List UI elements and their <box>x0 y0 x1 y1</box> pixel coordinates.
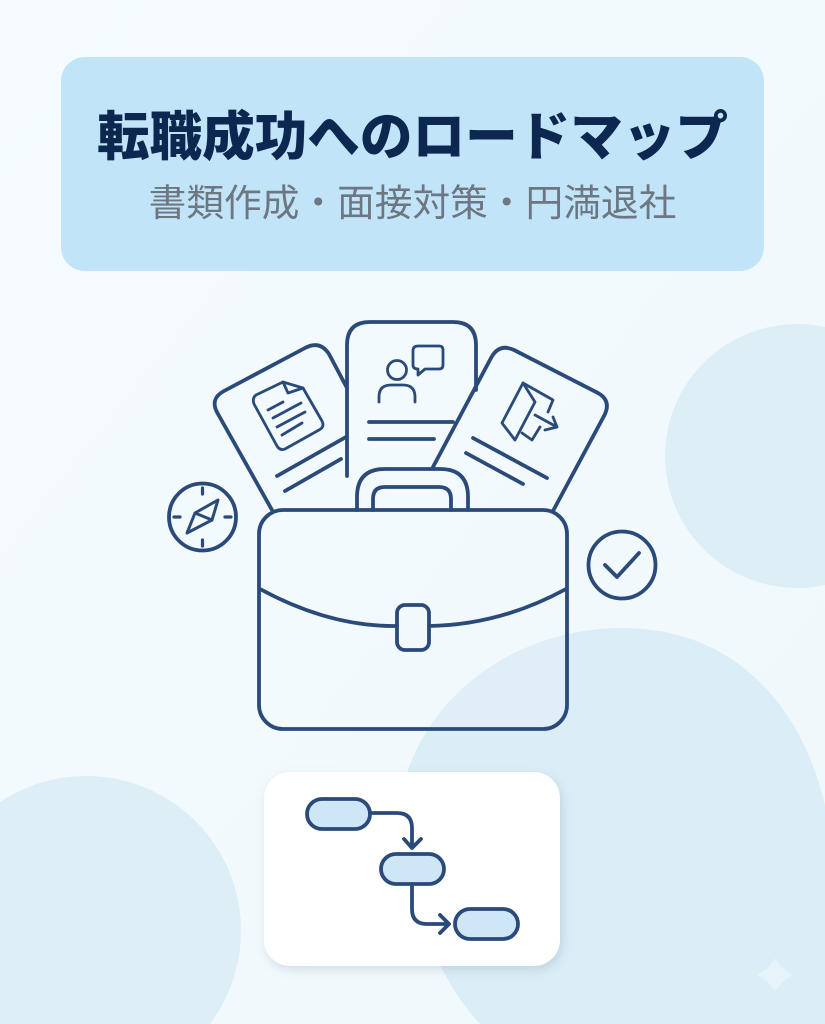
title panel <box>61 57 764 271</box>
card: document <box>215 345 347 510</box>
clasp <box>397 605 429 650</box>
card: resignation <box>433 348 607 511</box>
case body <box>259 510 567 729</box>
flowchart panel <box>264 772 562 970</box>
title: 転職成功へのロードマップ <box>97 108 728 167</box>
arrow 2 <box>412 884 449 933</box>
sparkle <box>757 958 793 992</box>
icon: compass <box>169 484 236 550</box>
arrow 1 <box>370 813 421 848</box>
node 3 <box>455 909 518 939</box>
handle <box>357 469 468 510</box>
briefcase <box>259 469 567 729</box>
node 1 <box>307 799 370 829</box>
card: interview <box>347 322 476 476</box>
node 2 <box>381 854 444 884</box>
icon: check <box>588 532 656 598</box>
flap seam <box>260 589 566 626</box>
subtitle: 書類作成・面接対策・円満退社 <box>149 182 676 224</box>
